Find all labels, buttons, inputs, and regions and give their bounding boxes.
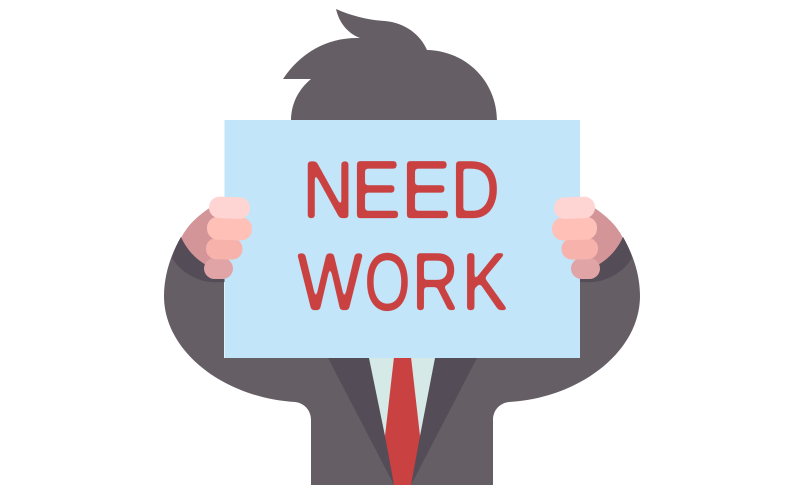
right hand fingers <box>552 196 600 279</box>
jacket lapels <box>328 358 477 485</box>
sign text: NEED: D <box>451 145 500 235</box>
left arm and sleeve <box>172 207 226 282</box>
sign text: WORK <box>298 236 507 327</box>
suit body <box>164 237 640 485</box>
sign text: NEED <box>302 145 500 236</box>
right arm and sleeve <box>578 207 632 282</box>
sign text: WORK: K <box>462 236 507 327</box>
sign board <box>224 120 580 358</box>
hair <box>283 9 497 121</box>
tie <box>385 357 420 485</box>
left hand fingers <box>204 196 252 279</box>
sign text: NEED: E <box>402 145 451 235</box>
sign text: NEED: N <box>302 145 354 236</box>
sign text: NEED: E <box>352 145 401 235</box>
sign text: WORK: R <box>412 237 458 327</box>
sign text: WORK: W <box>298 236 363 327</box>
shirt <box>369 358 435 480</box>
sign text: WORK: O <box>365 236 410 327</box>
